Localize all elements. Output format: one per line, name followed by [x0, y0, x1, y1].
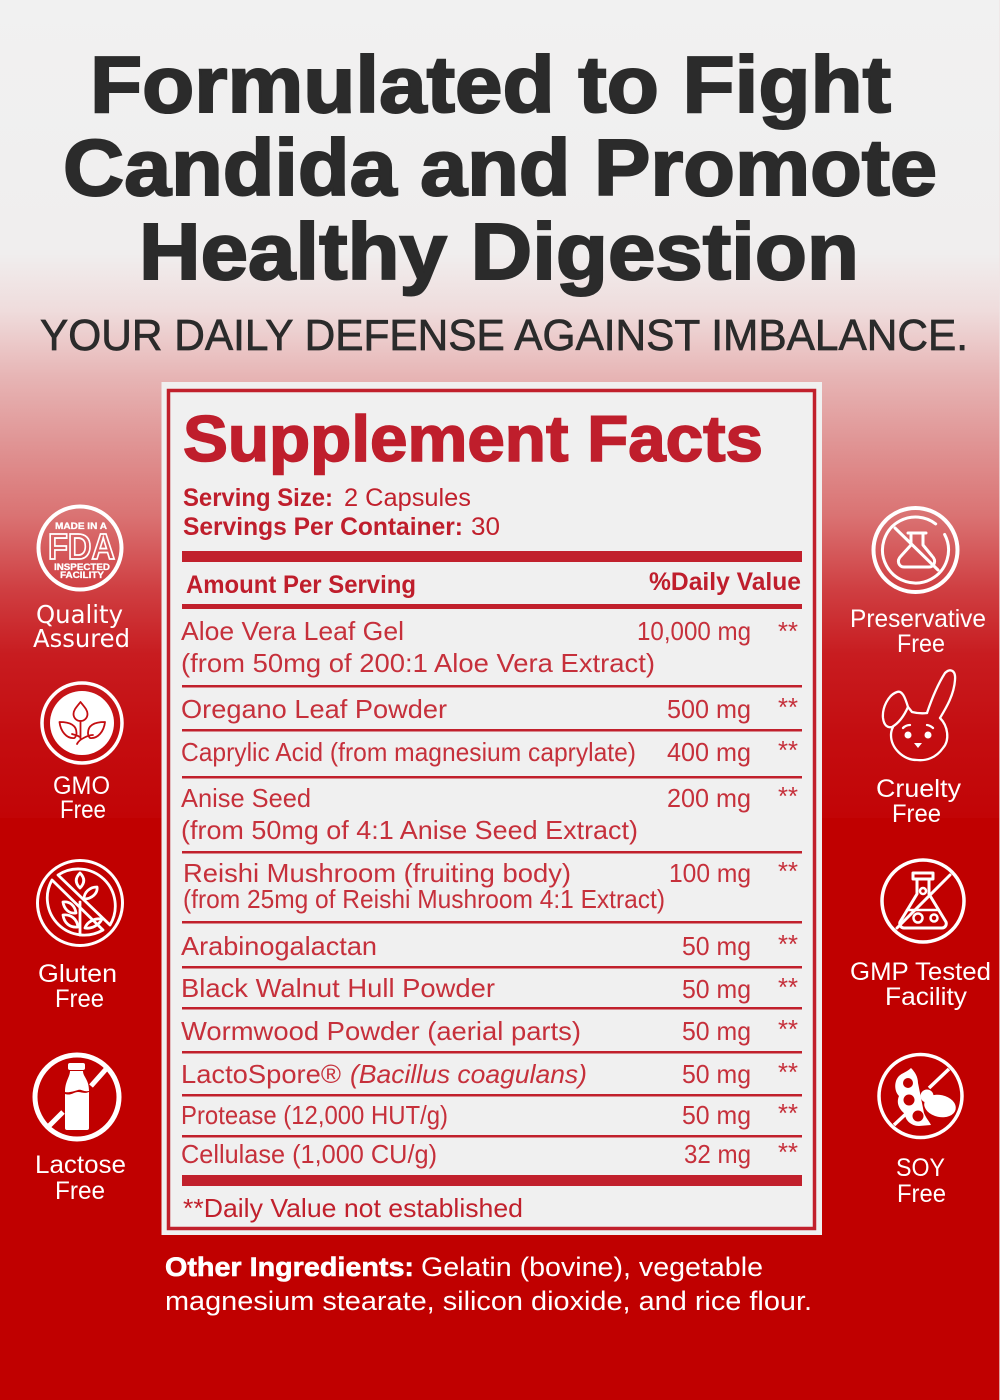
row: cellulase: Cellulase (1,000 CU/g) [181, 1139, 437, 1169]
icon: crossed soybeans [879, 1054, 962, 1138]
row: lactospore: ** [778, 1057, 798, 1087]
serving info [183, 484, 500, 541]
row: wormwood: ** [778, 1014, 798, 1044]
badge: GMP tested facility: Facility [885, 983, 968, 1011]
row: anise seed [181, 781, 798, 845]
panel: supplement facts [162, 382, 822, 1235]
other ingredients: magnesium stearate, silicon dioxide, and rice flour. [165, 1286, 812, 1316]
row: arabinogalactan [181, 929, 798, 961]
badge: lactose free [35, 1055, 126, 1205]
icon: crossed flask [882, 860, 964, 942]
badge: quality assured: Quality [36, 600, 123, 629]
row: reishi: (from 25mg of Reishi Mushroom 4:1 Extract) [183, 884, 665, 914]
badge: quality assured [33, 506, 130, 653]
icon: bunny [883, 670, 955, 760]
badge: soy free [879, 1054, 962, 1208]
row: arabinogalactan: Arabinogalactan [181, 931, 377, 961]
row: aloe vera: 10,000 mg [637, 616, 751, 646]
row: protease: Protease (12,000 HUT/g) [181, 1100, 448, 1130]
row: wormwood: 50 mg [682, 1016, 751, 1046]
table header [186, 568, 801, 599]
badge: GMO free: Free [60, 796, 106, 824]
icon: FDA seal: INSPECTED [54, 562, 110, 573]
row: cellulase [181, 1137, 798, 1169]
row: oregano [181, 692, 798, 724]
icon: FDA seal: MADE IN A [55, 521, 107, 532]
row: anise seed: ** [778, 781, 798, 811]
badge: quality assured: Assured [33, 624, 130, 653]
row: black walnut: ** [778, 972, 798, 1002]
row: black walnut: 50 mg [682, 974, 751, 1004]
row: anise seed: 200 mg [667, 783, 751, 813]
badge: GMO free [42, 683, 122, 824]
row: aloe vera: (from 50mg of 200:1 Aloe Vera Extract) [181, 648, 655, 678]
badge: cruelty free [876, 670, 962, 828]
row: oregano: ** [778, 692, 798, 722]
row: caprylic acid: ** [778, 735, 798, 765]
row: cellulase: ** [778, 1137, 798, 1167]
icon: FDA seal: FDA [48, 526, 115, 567]
title: Formulated to Fight [90, 40, 891, 129]
row: caprylic acid: 400 mg [667, 737, 751, 767]
row: lactospore: (Bacillus coagulans) [350, 1059, 587, 1089]
title [63, 40, 937, 296]
row: anise seed: Anise Seed [181, 783, 311, 813]
badge: GMP tested facility: GMP Tested [850, 958, 991, 986]
row: caprylic acid: Caprylic Acid (from magnesium caprylate) [181, 737, 636, 767]
row: protease: 50 mg [682, 1100, 751, 1130]
subtitle: YOUR DAILY DEFENSE AGAINST IMBALANCE. [40, 311, 968, 360]
row: wormwood [181, 1014, 798, 1046]
title: Candida and Promote [63, 123, 937, 212]
badge: cruelty free: Free [892, 800, 941, 828]
badge: gluten free [38, 860, 122, 1013]
badge: GMP tested facility [850, 860, 991, 1011]
row: aloe vera: Aloe Vera Leaf Gel [181, 616, 404, 646]
badge: soy free: SOY [896, 1154, 945, 1182]
row: arabinogalactan: 50 mg [682, 931, 751, 961]
row: cellulase: 32 mg [684, 1139, 751, 1169]
serving info: 30 [471, 513, 500, 541]
badge: lactose free: Free [55, 1177, 105, 1205]
row: black walnut [181, 972, 798, 1004]
row: wormwood: Wormwood Powder (aerial parts) [181, 1016, 581, 1046]
row: lactospore: LactoSpore® [181, 1059, 341, 1089]
icon: plant in disc [42, 683, 122, 763]
serving info: Servings Per Container: [183, 513, 463, 541]
badge: soy free: Free [897, 1180, 946, 1208]
row: reishi: 100 mg [669, 858, 751, 888]
badge: lactose free: Lactose [35, 1151, 126, 1179]
icon: crossed beaker [871, 505, 960, 595]
other ingredients: Gelatin (bovine), vegetable [421, 1252, 763, 1282]
icon: crossed bottle [35, 1055, 119, 1139]
row: reishi: ** [778, 856, 798, 886]
row: reishi: Reishi Mushroom (fruiting body) [183, 858, 571, 888]
other ingredients: Other Ingredients: [165, 1252, 414, 1282]
badge: gluten free: Free [55, 985, 104, 1013]
badge: gluten free: Gluten [38, 960, 117, 988]
serving info: 2 Capsules [344, 484, 471, 512]
row: reishi [183, 856, 798, 914]
table header: %Daily Value [649, 568, 801, 596]
badge: preservative free: Free [897, 630, 945, 658]
row: lactospore [181, 1057, 798, 1089]
table header: Amount Per Serving [186, 571, 416, 599]
icon: FDA seal [38, 506, 122, 590]
badge: GMO free: GMO [53, 772, 110, 800]
row: aloe vera: ** [778, 616, 798, 646]
badge: preservative free [850, 505, 986, 658]
row: lactospore: 50 mg [682, 1059, 751, 1089]
footnote: **Daily Value not established [183, 1193, 523, 1223]
serving info: Serving Size: [183, 484, 333, 512]
row: black walnut: Black Walnut Hull Powder [181, 973, 495, 1003]
badge: preservative free: Preservative [850, 605, 986, 633]
title: Healthy Digestion [139, 207, 859, 296]
badge: cruelty free: Cruelty [876, 775, 962, 803]
row: arabinogalactan: ** [778, 929, 798, 959]
row: oregano: Oregano Leaf Powder [181, 694, 447, 724]
other ingredients [165, 1252, 812, 1316]
icon: crossed wheat [38, 860, 122, 946]
row: anise seed: (from 50mg of 4:1 Anise Seed Extract) [181, 815, 638, 845]
row: protease: ** [778, 1098, 798, 1128]
row: protease [181, 1098, 798, 1130]
row: aloe vera [181, 616, 798, 678]
icon: FDA seal: FACILITY [60, 570, 105, 581]
heading: supplement facts: Supplement Facts [183, 402, 763, 475]
row: oregano: 500 mg [667, 694, 751, 724]
